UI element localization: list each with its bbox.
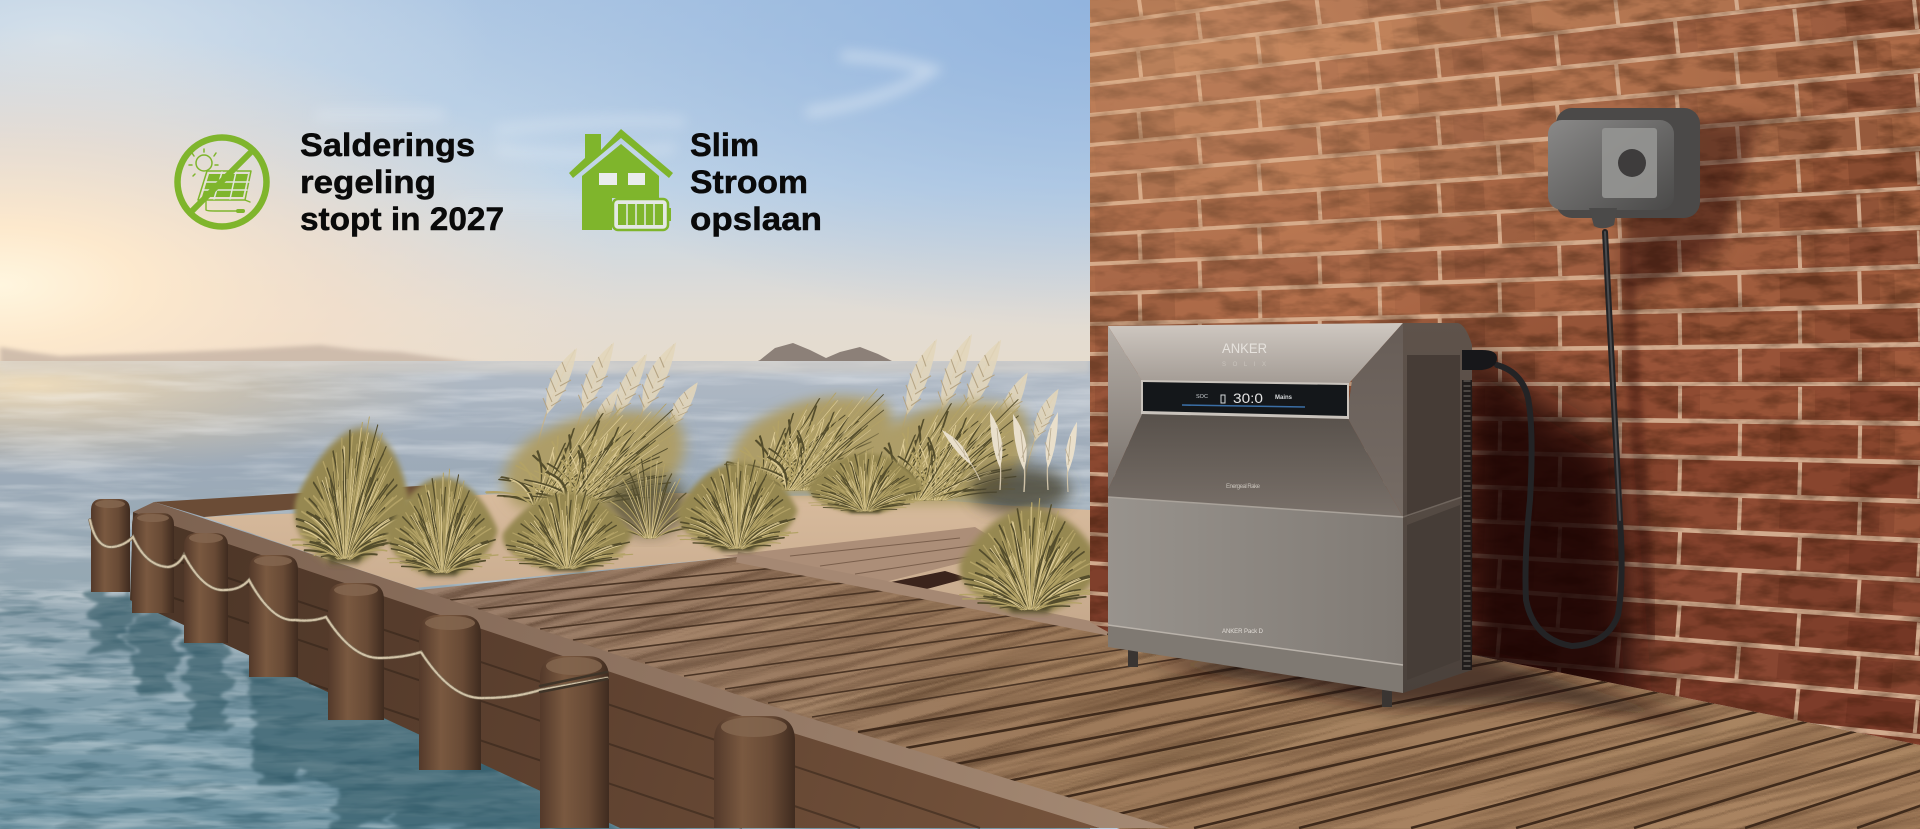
icon: house with battery [569, 129, 673, 230]
grass clump: wind-blown back left [475, 404, 726, 509]
brick wall [1090, 0, 1920, 774]
rocky islands [747, 343, 902, 366]
grass clump: wind-blown back centre [703, 389, 932, 494]
text: slim stroom opslaan: opslaan [690, 201, 822, 237]
grass clump: front right [675, 455, 798, 556]
grass clump: beside wall [957, 499, 1102, 618]
text: slim stroom opslaan [690, 127, 822, 237]
dune grass [285, 334, 1102, 618]
sand dunes [204, 492, 1090, 625]
rope [90, 520, 607, 698]
front top panel [1108, 323, 1403, 385]
post 6 [419, 615, 481, 770]
back deck strip [722, 527, 1012, 600]
pier side wall [130, 512, 1100, 828]
post 8 [714, 716, 795, 828]
lower module [1108, 497, 1403, 665]
post 5 [328, 583, 384, 720]
text: salderingsregeling: stopt in 2027 [300, 201, 504, 237]
post 1 [91, 499, 130, 592]
brand text: ANKER [1222, 340, 1267, 356]
background: sky [0, 0, 1740, 545]
distant mountains [0, 345, 490, 366]
frame back board [154, 484, 450, 517]
grass clump: front centre [500, 486, 633, 575]
front right panel [1347, 323, 1403, 517]
icon: no solar panel [178, 138, 266, 226]
sea [0, 361, 1090, 829]
base strip [1108, 625, 1403, 693]
feature: slim stroom opslaan [569, 127, 822, 237]
plug [1462, 350, 1497, 370]
battery device [1108, 323, 1472, 707]
grass clump: mid left [385, 469, 498, 581]
device side [1403, 323, 1472, 693]
brick courses [1090, 0, 1920, 774]
clouds [320, 56, 933, 205]
post tops [95, 500, 787, 737]
module label: Energeal Rake [1226, 484, 1261, 490]
grass clump: over dark mass [603, 455, 698, 538]
feature: salderingsregeling [178, 127, 504, 237]
white feathers by wall [942, 412, 1077, 492]
post 4 [249, 555, 298, 677]
text: salderingsregeling: regeling [300, 164, 436, 200]
front centre panel [1108, 412, 1403, 517]
sub brand text: SOLIX [1222, 362, 1266, 368]
display: Mains [1275, 395, 1293, 401]
post 3 [184, 533, 228, 643]
brick tone variation [1090, 0, 1920, 717]
device shadow on deck [1140, 655, 1720, 728]
deck back trim [737, 557, 1108, 630]
post 2 [132, 513, 174, 613]
text: salderingsregeling: Salderings [300, 127, 475, 163]
text: slim stroom opslaan: Slim [690, 127, 759, 163]
dark grass mass right [970, 466, 1070, 514]
power cable: outlet to floor loop and device [1497, 232, 1622, 646]
grass clump: wind-blown back right [829, 394, 1069, 504]
text: salderingsregeling [300, 127, 504, 237]
wall outlet [1548, 108, 1700, 228]
grass clump: gold [806, 448, 923, 516]
water reflection of pier [91, 585, 620, 829]
lower module label: ANKER Pack D [1222, 629, 1264, 635]
posts [91, 499, 795, 828]
brick joints [1090, 0, 1920, 756]
front left panel [1108, 326, 1143, 490]
pampas plumes centre [535, 342, 698, 470]
post 7 [540, 656, 609, 828]
display [1141, 380, 1349, 419]
display: SOC [1196, 394, 1208, 400]
deck hole [876, 571, 968, 594]
device feet [1128, 650, 1392, 707]
text: slim stroom opslaan: Stroom [690, 164, 808, 200]
display: 30:0 [1233, 390, 1263, 406]
deck edge trim [133, 502, 1170, 828]
pampas plumes right [895, 334, 1059, 480]
grass clump: sea side [285, 417, 419, 570]
main deck planks [420, 552, 1920, 829]
dark grass mass centre [608, 475, 688, 535]
device shadow on wall [1460, 340, 1640, 710]
